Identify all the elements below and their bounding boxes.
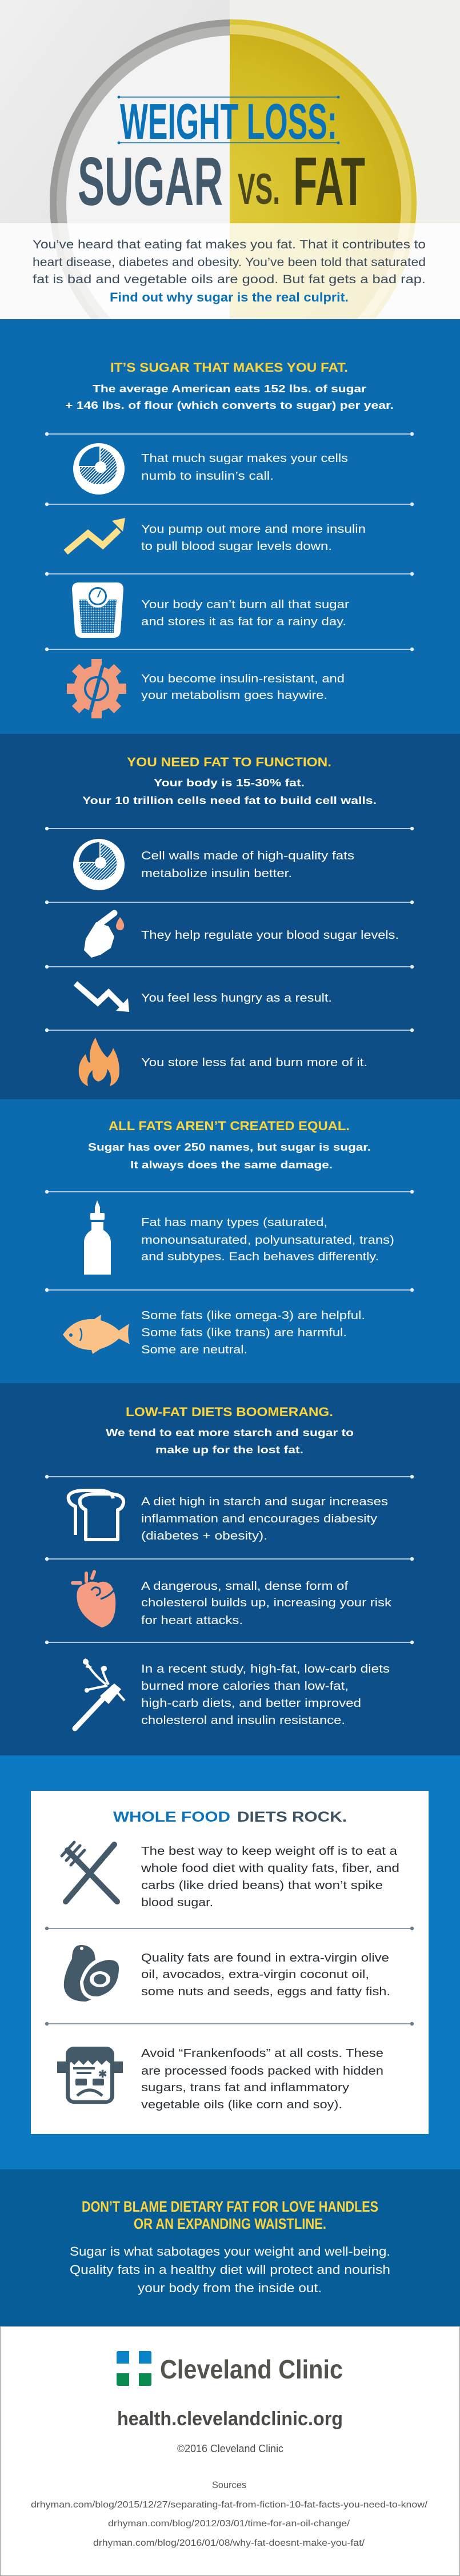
text: starch inflammation: A diet high in starch and sugar increases — [141, 1496, 388, 1508]
heading: section 3 — [88, 1119, 371, 1171]
icon: cell wall — [73, 839, 125, 890]
text: best way: carbs (like dried beans) that won’t spike — [141, 1879, 383, 1892]
text: study — [141, 1663, 390, 1727]
text: frankenfoods: Avoid “Frankenfoods” at all costs. These — [141, 2047, 383, 2060]
text: conclusion body — [70, 2244, 390, 2295]
heading: section 4: We tend to eat more starch and sugar to — [106, 1427, 354, 1438]
text: row 1: That much sugar makes your cells — [141, 452, 348, 465]
icon: heart — [71, 1570, 115, 1627]
text: quality fats: Quality fats are found in extra-virgin olive — [141, 1952, 389, 1964]
text: best way — [141, 1845, 399, 1909]
heading: section 1: IT’S SUGAR THAT MAKES YOU FAT. — [110, 360, 348, 375]
text: cholesterol: for heart attacks. — [141, 1614, 243, 1627]
text: best way: blood sugar. — [141, 1896, 213, 1909]
callout box: whole food — [31, 1791, 429, 2134]
text: copyright: ©2016 Cleveland Clinic — [177, 2443, 283, 2454]
icon: bread — [69, 1490, 123, 1540]
text: starch inflammation: (diabetes + obesity). — [141, 1530, 267, 1542]
title: sugar vs fat: FAT — [293, 143, 365, 220]
heading: don't blame dietary fat: OR AN EXPANDING WAISTLINE. — [134, 2215, 326, 2232]
intro text block — [0, 223, 460, 320]
heading: section 4: LOW-FAT DIETS BOOMERANG. — [126, 1405, 333, 1419]
heading: section 3: Sugar has over 250 names, but sugar is sugar. — [88, 1142, 371, 1153]
icon: oil bottle — [84, 1200, 111, 1275]
heading: whole food diets rock: DIETS ROCK. — [237, 1809, 347, 1825]
text: cholesterol — [141, 1580, 392, 1627]
text: row 3 — [141, 598, 349, 628]
text: fat types — [141, 1216, 394, 1263]
heading: section 3: It always does the same damage. — [130, 1159, 333, 1171]
heading: don't blame dietary fat — [82, 2198, 378, 2232]
text: helpful harmful: Some are neutral. — [141, 1344, 247, 1356]
icon: frankenfood — [57, 2047, 123, 2104]
heading: section 1: The average American eats 152 lbs. of sugar — [93, 383, 366, 395]
text: fat types: and subtypes. Each behaves differently. — [141, 1251, 379, 1263]
text: quality fats: some nuts and seeds, eggs and fatty fish. — [141, 1986, 390, 1998]
title: sugar vs fat: VS. — [238, 165, 280, 214]
text: row 2: You pump out more and more insulin — [141, 523, 366, 536]
icon: fork with herb — [75, 1659, 125, 1729]
text: fat types: Fat has many types (saturated, — [141, 1216, 327, 1229]
icon: finger prick — [84, 913, 124, 958]
text: fat types: monounsaturated, polyunsaturated, trans) — [141, 1234, 394, 1247]
heading: don't blame dietary fat: DON’T BLAME DIETARY FAT FOR LOVE HANDLES — [82, 2198, 378, 2215]
icon: frankenfood: ✱ — [98, 2068, 107, 2080]
text: row 1 — [141, 452, 348, 483]
text: cell walls — [141, 850, 354, 880]
text: frankenfoods: sugars, trans fat and inflammatory — [141, 2081, 349, 2094]
heading: section 1: + 146 lbs. of flour (which converts to sugar) per year. — [65, 400, 394, 411]
text: row 4 — [141, 673, 345, 702]
text: conclusion body: your body from the inside out. — [138, 2281, 322, 2295]
text: study: high-carb diets, and better improved — [141, 1697, 361, 1710]
text: sources: drhyman.com/blog/2016/01/08/why-fat-doesnt-make-you-fat/ — [93, 2538, 365, 2548]
text: frankenfoods — [141, 2047, 383, 2111]
text: row 2 — [141, 523, 366, 553]
heading: section 2: Your body is 15-30% fat. — [154, 777, 305, 789]
intro text block: fat is bad and vegetable oils are good. But fat gets a bad rap. — [33, 273, 426, 286]
panel: it's sugar that makes you fat — [0, 319, 460, 734]
text: less hungry: You feel less hungry as a result. — [141, 992, 332, 1004]
heading: section 2: YOU NEED FAT TO FUNCTION. — [127, 755, 331, 769]
text: sources: Sources — [212, 2479, 246, 2490]
text: cell walls: Cell walls made of high-quality fats — [141, 850, 354, 862]
header: photo of sugar and oil — [0, 0, 460, 319]
panel: whole food diets rock — [0, 1755, 460, 2169]
heading: section 3: ALL FATS AREN’T CREATED EQUAL. — [109, 1119, 350, 1133]
text: frankenfoods: are processed foods packed with hidden — [141, 2065, 383, 2077]
icon: rising arrow — [66, 518, 125, 552]
text: row 4: your metabolism goes haywire. — [141, 689, 327, 702]
text: row 3: and stores it as fat for a rainy day. — [141, 616, 346, 628]
icon: avocado — [64, 1945, 122, 2002]
icon: cell — [73, 443, 125, 495]
text: cell walls: metabolize insulin better. — [141, 867, 292, 880]
panel: you need fat to function — [0, 734, 460, 1099]
text: row 3: Your body can’t burn all that sugar — [141, 598, 349, 611]
heading: section 4: make up for the lost fat. — [155, 1444, 303, 1456]
heading: section 2: Your 10 trillion cells need fat to build cell walls. — [82, 795, 377, 806]
heading: whole food diets rock — [113, 1809, 347, 1825]
icon: flame — [79, 1038, 119, 1086]
icon: gear — [67, 659, 126, 718]
text: website: health.clevelandclinic.org — [117, 2408, 343, 2430]
text: blood sugar: They help regulate your blood sugar levels. — [141, 929, 399, 942]
text: conclusion body: Quality fats in a healthy diet will protect and nourish — [70, 2262, 390, 2277]
text: sources — [31, 2479, 428, 2548]
icon: weight scale — [72, 582, 123, 638]
panel: conclusion — [0, 2169, 460, 2326]
intro text block: Find out why sugar is the real culprit. — [110, 290, 349, 304]
text: quality fats — [141, 1952, 390, 1998]
text: frankenfoods: vegetable oils (like corn and soy). — [141, 2099, 342, 2111]
heading: section 1 — [65, 360, 394, 411]
text: best way: The best way to keep weight off is to eat a — [141, 1845, 398, 1858]
icon: falling arrow — [75, 983, 129, 1012]
text: starch inflammation: inflammation and encourages diabesity — [141, 1513, 377, 1525]
text: starch inflammation — [141, 1496, 388, 1542]
logo: Cleveland Clinic: Cleveland Clinic — [160, 2354, 343, 2384]
text: helpful harmful: Some fats (like trans) are harmful. — [141, 1327, 347, 1339]
text: study: In a recent study, high-fat, low-carb diets — [141, 1663, 390, 1675]
text: sources: drhyman.com/blog/2012/03/01/time-for-an-oil-change/ — [108, 2519, 350, 2529]
icon: fork and knife — [62, 1842, 117, 1902]
text: quality fats: oil, avocados, extra-virgin coconut oil, — [141, 1968, 369, 1981]
text: burn fat: You store less fat and burn more of it. — [141, 1056, 367, 1069]
panel: all fats aren't created equal — [0, 1099, 460, 1383]
text: study: burned more calories than low-fat, — [141, 1680, 349, 1693]
heading: section 2 — [82, 755, 377, 806]
icon: fish — [63, 1315, 130, 1354]
text: helpful harmful — [141, 1309, 365, 1356]
text: conclusion body: Sugar is what sabotages your weight and well-being. — [70, 2244, 390, 2258]
text: cholesterol: cholesterol builds up, increasing your risk — [141, 1597, 392, 1609]
text: study: cholesterol and insulin resistance. — [141, 1714, 345, 1727]
intro text block: heart disease, diabetes and obesity. You’ve been told that saturated — [33, 256, 426, 269]
text: helpful harmful: Some fats (like omega-3) are helpful. — [141, 1309, 365, 1322]
text: row 1: numb to insulin’s call. — [141, 470, 274, 483]
text: sources: drhyman.com/blog/2015/12/27/separating-fat-from-fiction-10-fat-facts-you-need-to-know/ — [31, 2500, 428, 2510]
intro text block: You’ve heard that eating fat makes you fat. That it contributes to — [33, 238, 426, 251]
title: weight loss — [118, 93, 339, 150]
text: row 2: to pull blood sugar levels down. — [141, 540, 332, 553]
text: best way: whole food diet with quality fats, fiber, and — [141, 1862, 399, 1875]
heading: section 4 — [106, 1405, 354, 1456]
heading: whole food diets rock: WHOLE FOOD — [113, 1809, 230, 1825]
title: sugar vs fat: SUGAR — [78, 143, 223, 220]
footer — [0, 2326, 459, 2575]
logo: Cleveland Clinic — [117, 2351, 343, 2386]
panel: low-fat diets boomerang — [0, 1383, 460, 1755]
text: row 4: You become insulin-resistant, and — [141, 673, 345, 685]
text: cholesterol: A dangerous, small, dense form of — [141, 1580, 349, 1593]
